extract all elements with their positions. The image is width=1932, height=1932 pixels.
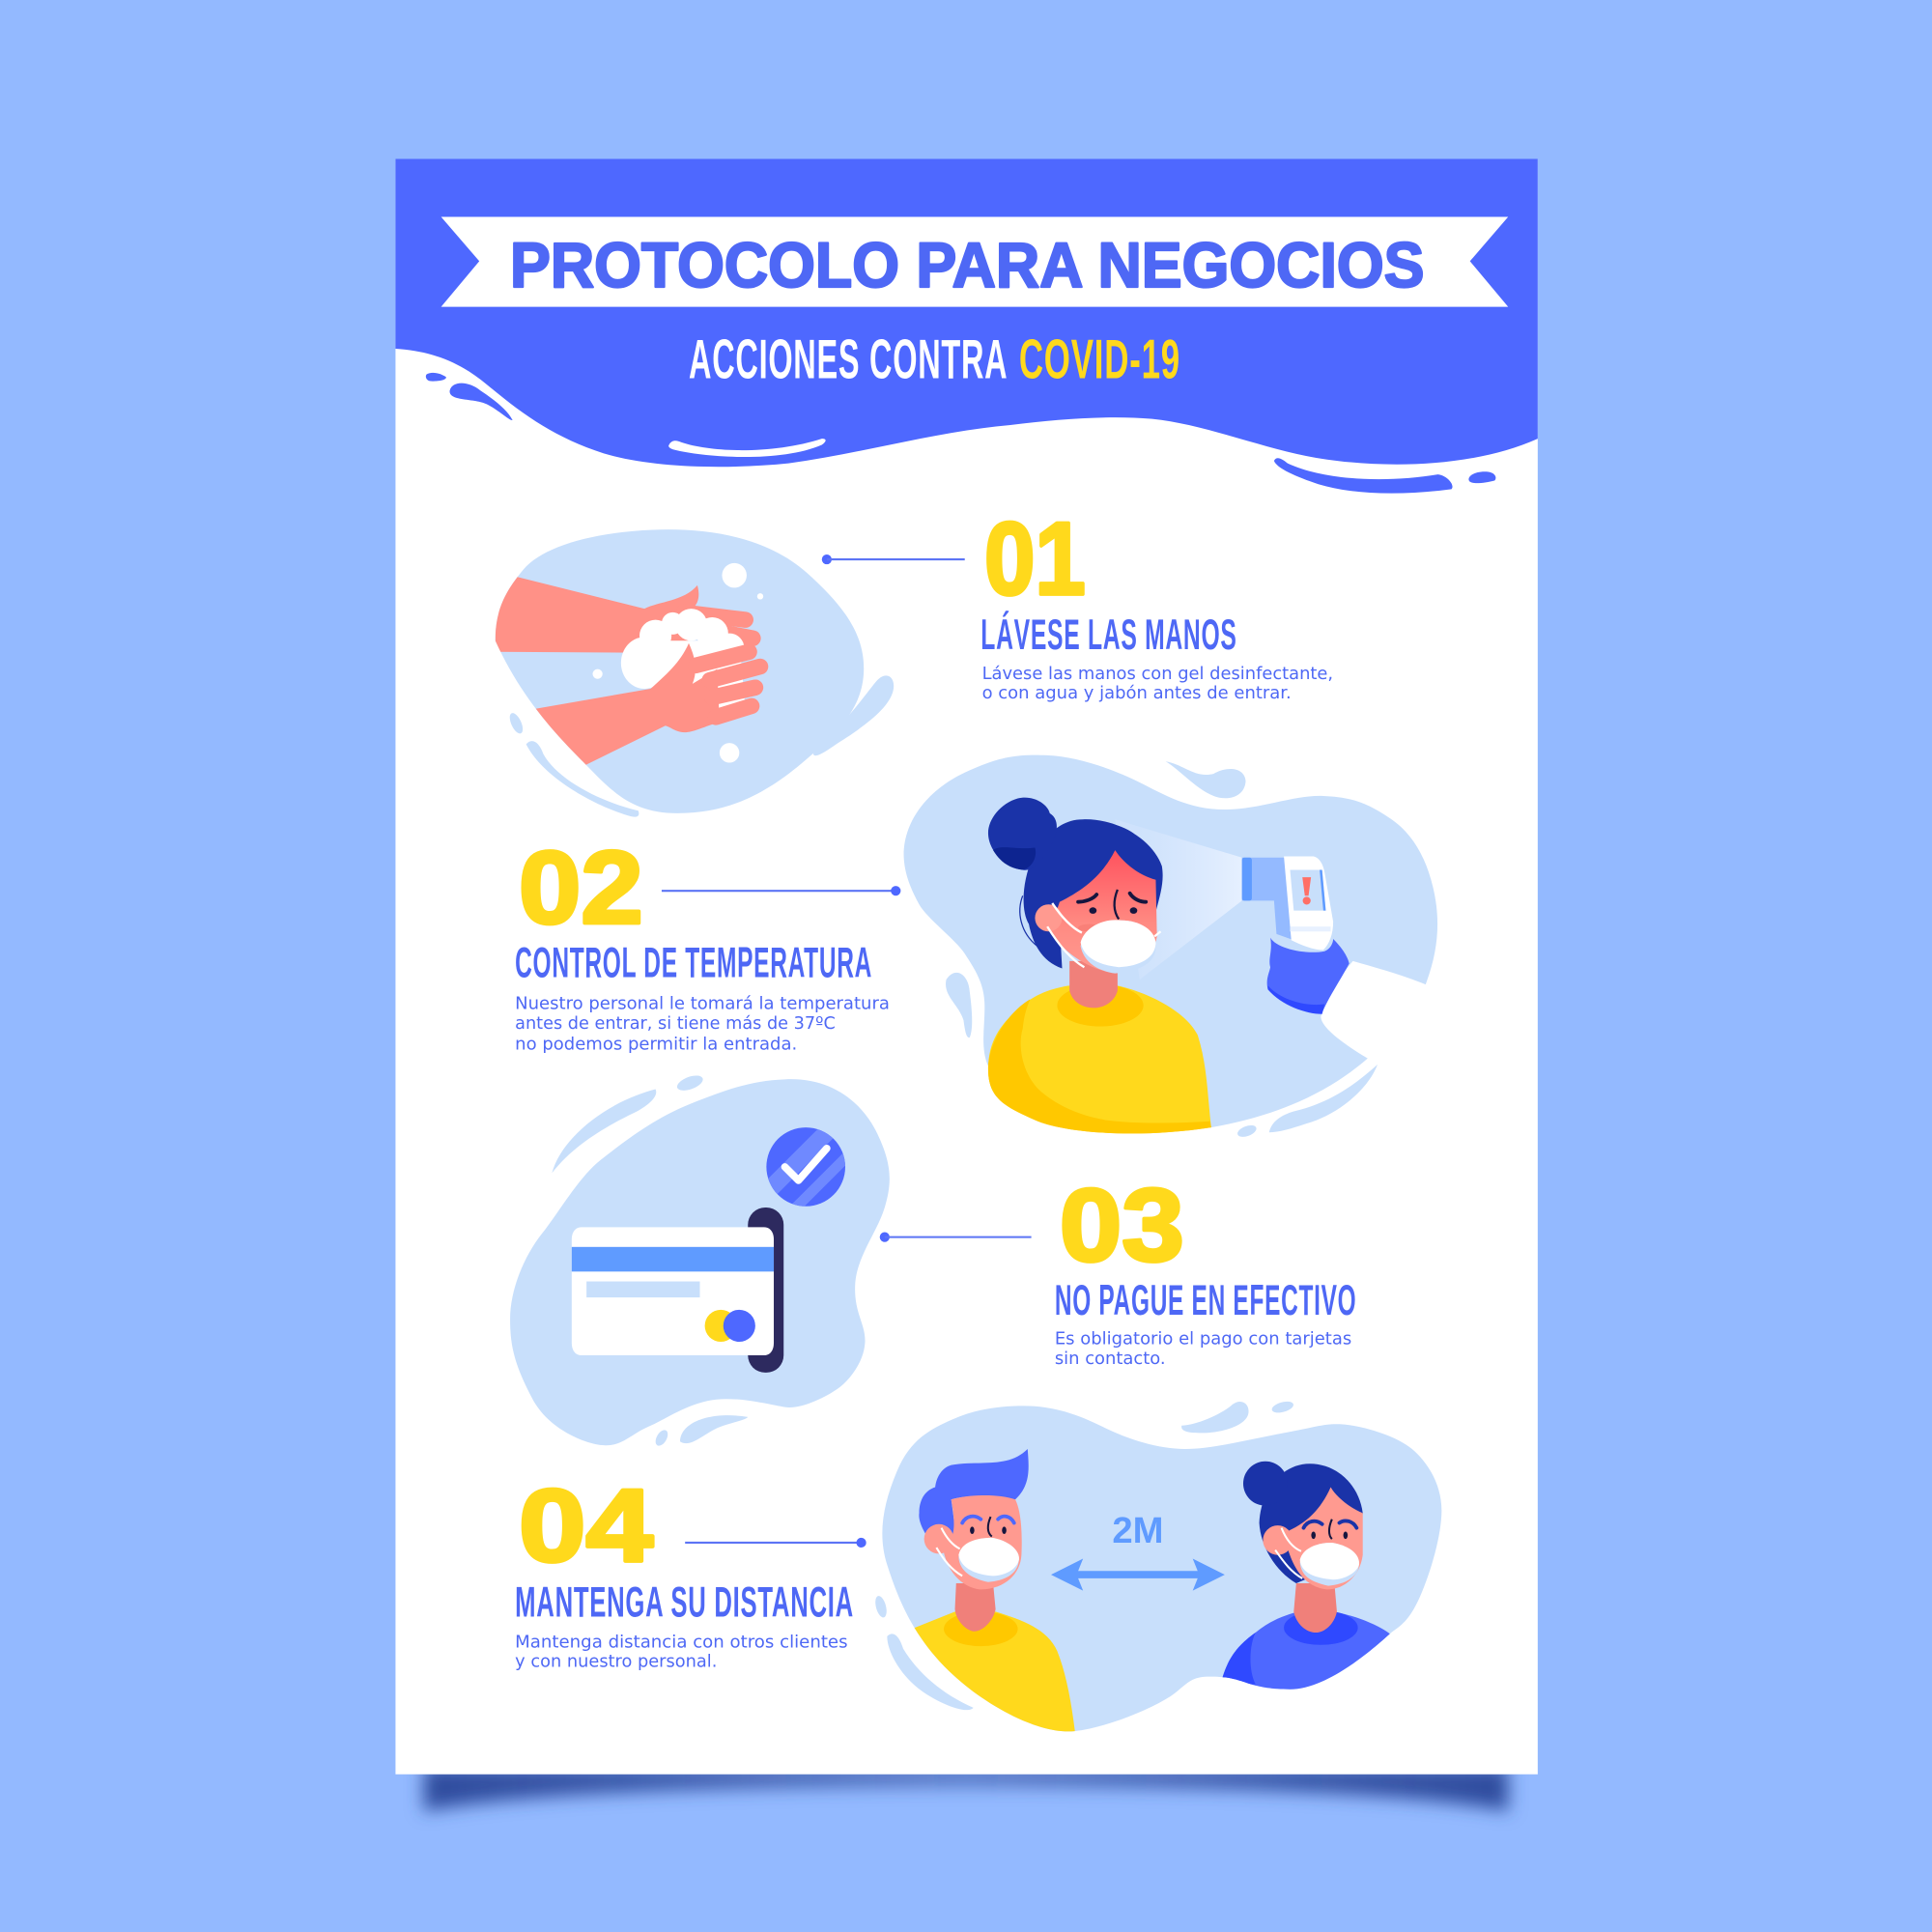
yellow shirt — [988, 984, 1211, 1133]
step 02 text: Nuestro personal le tomará la temperatura — [515, 994, 890, 1014]
distance label: 2M — [1112, 1510, 1164, 1551]
step 04 number: 04 — [519, 1467, 653, 1583]
infographic poster — [395, 158, 1538, 1822]
title ribbon — [441, 216, 1508, 307]
step 01 number: 01 — [984, 500, 1086, 616]
step 04 text — [515, 1632, 848, 1672]
thermometer beam — [1115, 819, 1242, 980]
alert mark — [1302, 877, 1311, 904]
arrow: two metres — [1051, 1559, 1225, 1591]
poster card — [395, 159, 1538, 1775]
panel 2: temperature check — [904, 755, 1437, 1139]
step 01 text: o con agua y jabón antes de entrar. — [982, 683, 1292, 703]
panel 3: card payment — [510, 1072, 890, 1448]
step 02 text: antes de entrar, si tiene más de 37ºC — [515, 1013, 836, 1034]
step 01 heading: LÁVESE LAS MANOS — [980, 611, 1237, 659]
blush — [1078, 924, 1100, 931]
face — [1050, 850, 1157, 972]
connector 04 — [685, 1538, 867, 1548]
connector 03 — [880, 1233, 1032, 1242]
step 03 text: Es obligatorio el pago con tarjetas — [1055, 1329, 1351, 1350]
gloved hand — [1267, 938, 1350, 1014]
header wave — [395, 159, 1538, 467]
woman hair — [1243, 1462, 1363, 1583]
brows and eyes — [1078, 894, 1146, 902]
title: PROTOCOLO PARA NEGOCIOS — [510, 230, 1424, 301]
man mask — [936, 1528, 1019, 1582]
header splashes — [426, 373, 1495, 494]
man shirt — [914, 1611, 1075, 1731]
bubbles — [593, 563, 763, 763]
step 02 text — [515, 994, 890, 1055]
man with mask — [914, 1449, 1075, 1731]
poster shadow — [424, 1767, 1508, 1811]
subtitle: ACCIONES CONTRA — [689, 329, 1008, 391]
subtitle: COVID-19 — [1019, 329, 1180, 391]
icon: approved check — [766, 1127, 845, 1207]
connector 02 — [662, 886, 900, 895]
hair and bun — [988, 798, 1163, 969]
step 01 text — [982, 664, 1333, 703]
step 02 heading: CONTROL DE TEMPERATURA — [515, 939, 872, 986]
woman face — [1284, 1488, 1363, 1589]
panel 1: hand washing — [487, 529, 894, 817]
infrared thermometer — [1242, 856, 1333, 950]
man hair — [919, 1449, 1029, 1548]
man face — [943, 1495, 1022, 1589]
soap foam — [620, 609, 745, 708]
woman with mask — [1222, 1462, 1390, 1700]
step 02 text: no podemos permitir la entrada. — [515, 1035, 797, 1055]
card reader — [748, 1208, 783, 1373]
step 03 heading: NO PAGUE EN EFECTIVO — [1055, 1277, 1356, 1324]
icon: washing hands — [487, 569, 760, 766]
step 03 text — [1055, 1329, 1351, 1369]
step 03 number: 03 — [1060, 1167, 1184, 1283]
step 04 heading: MANTENGA SU DISTANCIA — [515, 1578, 854, 1626]
woman mask — [1275, 1528, 1359, 1586]
woman with fever — [988, 798, 1211, 1133]
step 03 text: sin contacto. — [1055, 1349, 1166, 1369]
step 02 number: 02 — [519, 829, 643, 945]
woman shirt — [1223, 1611, 1390, 1690]
face mask — [1047, 903, 1161, 974]
credit card — [572, 1227, 774, 1355]
panel 4: social distance — [873, 1400, 1441, 1737]
connector 01 — [822, 554, 965, 564]
step 04 text: y con nuestro personal. — [515, 1652, 717, 1672]
step 04 text: Mantenga distancia con otros clientes — [515, 1632, 848, 1652]
step 01 text: Lávese las manos con gel desinfectante, — [982, 664, 1333, 684]
